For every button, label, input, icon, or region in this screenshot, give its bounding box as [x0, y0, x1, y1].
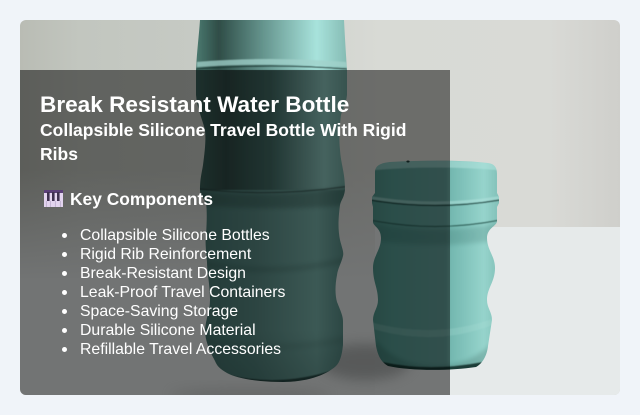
subtitle — [40, 120, 406, 164]
component list — [62, 227, 285, 358]
subtitle: Collapsible Silicone Travel Bottle With Rigid — [40, 120, 406, 140]
component list: Refillable Travel Accessories — [80, 341, 281, 358]
dark text panel — [20, 70, 450, 395]
component list: Collapsible Silicone Bottles — [80, 227, 270, 244]
component list: Break-Resistant Design — [80, 265, 246, 282]
component list: Durable Silicone Material — [80, 322, 256, 339]
subtitle: Ribs — [40, 144, 78, 164]
title: Break Resistant Water Bottle — [40, 92, 349, 117]
large bottle — [196, 20, 347, 382]
table shadows — [170, 344, 410, 402]
component list: Rigid Rib Reinforcement — [80, 246, 251, 263]
small bottle — [372, 160, 499, 370]
component list: Leak-Proof Travel Containers — [80, 284, 285, 301]
section heading: Key Components — [70, 189, 213, 209]
icon: musical keyboard — [44, 190, 63, 207]
component list: Space-Saving Storage — [80, 303, 238, 320]
small bottle cap vent — [406, 160, 410, 162]
table surface — [20, 170, 620, 395]
